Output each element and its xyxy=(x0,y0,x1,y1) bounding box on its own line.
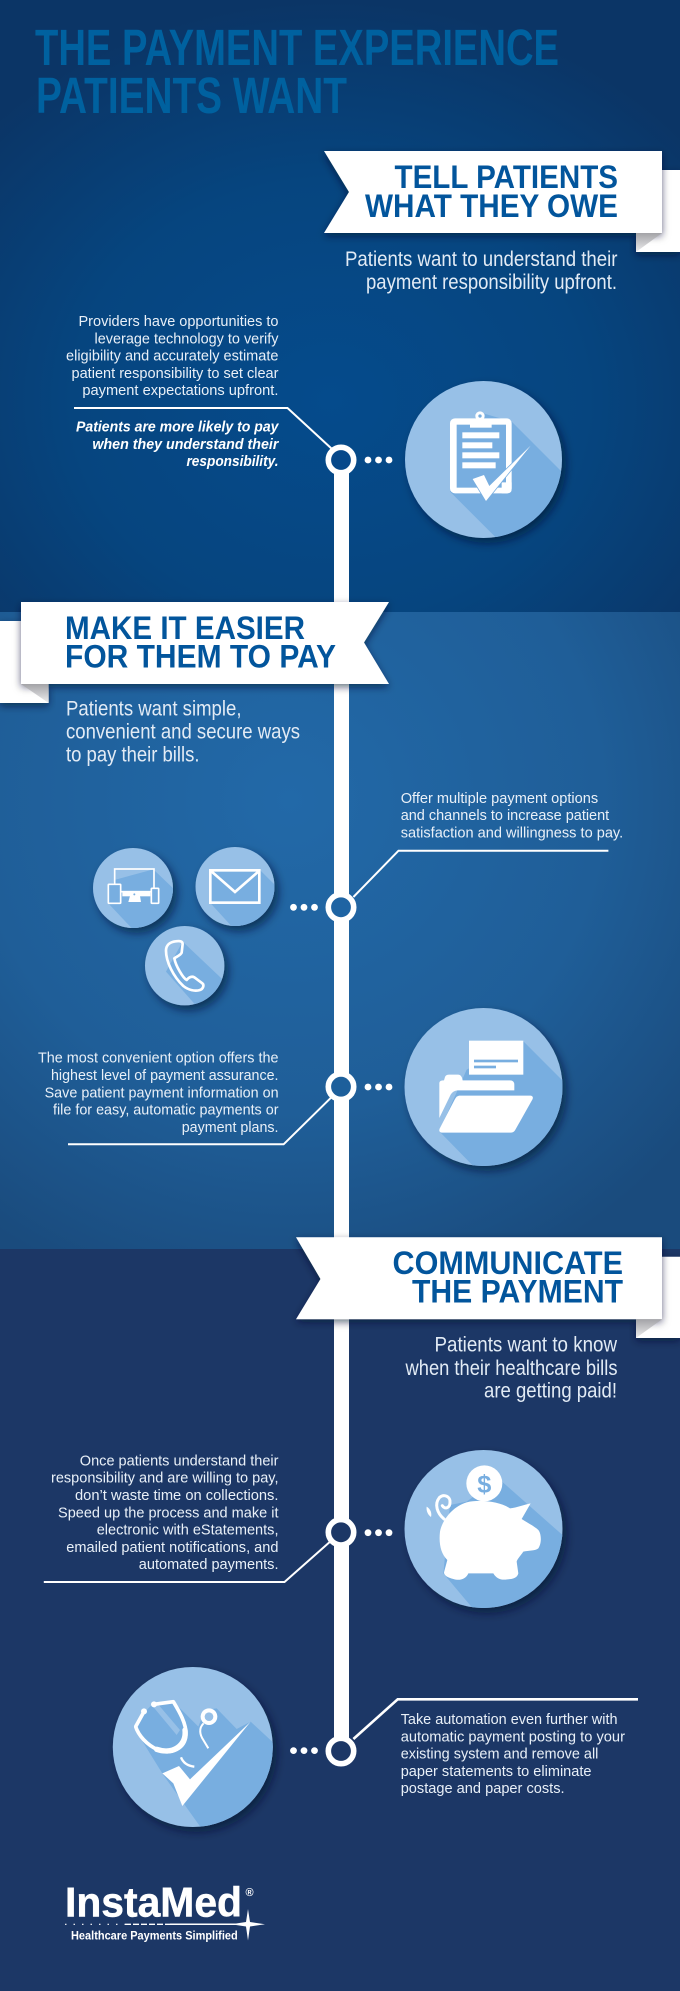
callout connector xyxy=(74,408,332,449)
timeline node xyxy=(328,447,354,473)
subheading: to pay their bills. xyxy=(66,743,200,767)
subheading: payment responsibility upfront. xyxy=(366,270,617,294)
timeline node xyxy=(328,1738,354,1764)
text block: payment options: Offer multiple payment options xyxy=(401,790,598,807)
logo: InstaMed: ® xyxy=(246,1887,254,1899)
ellipsis dots xyxy=(290,1747,318,1754)
text block: convenient option: highest level of payment assurance. xyxy=(51,1067,278,1084)
text block: speed up: Speed up the process and make it xyxy=(58,1504,279,1521)
ellipsis dots xyxy=(290,904,318,911)
text block: payment options xyxy=(401,790,623,842)
ribbon: communicate: COMMUNICATE xyxy=(392,1245,623,1281)
text block: providers: payment expectations upfront. xyxy=(82,382,278,399)
panel: make it easier for them to pay xyxy=(0,602,623,1173)
title xyxy=(35,19,559,124)
background: section two xyxy=(0,612,680,1249)
callout connector xyxy=(44,1542,330,1582)
callout connector xyxy=(68,1098,331,1144)
subheading xyxy=(66,697,300,767)
subheading: are getting paid! xyxy=(484,1379,617,1403)
text block: speed up: automated payments. xyxy=(139,1556,278,1573)
text block: payment options: and channels to increase patient xyxy=(401,807,610,824)
text block: speed up: don’t waste time on collections. xyxy=(75,1487,278,1504)
callout text: responsibility. xyxy=(186,453,278,470)
panel: communicate the payment xyxy=(44,1237,680,1833)
text block: convenient option xyxy=(38,1050,279,1136)
callout text xyxy=(76,419,280,470)
text block: speed up: electronic with eStatements, xyxy=(97,1522,278,1539)
text block: providers xyxy=(66,313,279,399)
text block: speed up: Once patients understand their xyxy=(80,1452,278,1469)
callout text: Patients are more likely to pay xyxy=(76,419,279,436)
icon: piggy bank xyxy=(404,1450,570,1615)
ribbon: communicate: THE PAYMENT xyxy=(412,1274,623,1310)
icon: clipboard with check xyxy=(405,381,570,545)
icon: folder xyxy=(404,1008,570,1173)
text block: convenient option: Save patient payment information on xyxy=(45,1084,279,1101)
subheading xyxy=(345,247,618,294)
text block: providers: leverage technology to verify xyxy=(94,330,279,347)
timeline node xyxy=(328,1074,354,1099)
ribbon: tell patients: WHAT THEY OWE xyxy=(365,188,618,224)
icon: envelope xyxy=(196,847,278,930)
ribbon: tell patients: TELL PATIENTS xyxy=(394,159,618,195)
ellipsis dots xyxy=(365,457,392,463)
title: PATIENTS WANT xyxy=(36,67,347,124)
icon: stethoscope and check xyxy=(113,1667,278,1833)
icon: piggy bank: $ xyxy=(477,1470,491,1498)
callout text: when they understand their xyxy=(92,436,280,453)
text block: speed up: emailed patient notifications, and xyxy=(66,1539,278,1556)
subheading xyxy=(405,1333,618,1403)
subheading: convenient and secure ways xyxy=(66,720,300,744)
subheading: Patients want to know xyxy=(434,1333,617,1357)
timeline spine xyxy=(334,470,349,1740)
timeline node xyxy=(328,895,354,920)
ellipsis dots xyxy=(365,1529,392,1536)
text block: automation: paper statements to eliminate xyxy=(401,1763,592,1780)
text block: speed up: responsibility and are willing to pay, xyxy=(51,1470,278,1487)
text block: convenient option: payment plans. xyxy=(182,1119,278,1136)
text block: automation: Take automation even further with xyxy=(401,1711,618,1728)
panel: tell patients what they owe xyxy=(66,151,680,545)
handset xyxy=(166,941,203,991)
text block: automation: automatic payment posting to your xyxy=(401,1728,625,1745)
logo: InstaMed xyxy=(65,1879,265,1942)
text block: automation: postage and paper costs. xyxy=(401,1780,565,1797)
text block: convenient option: The most convenient option offers the xyxy=(38,1050,278,1067)
text block: convenient option: file for easy, automatic payments or xyxy=(53,1102,278,1119)
text block: providers: Providers have opportunities to xyxy=(78,313,278,330)
text block: providers: eligibility and accurately estimate xyxy=(66,348,278,364)
ribbon: make it easier xyxy=(0,602,389,703)
callout connector xyxy=(353,851,608,897)
ribbon: tell patients xyxy=(324,151,680,252)
icon: devices xyxy=(93,848,177,932)
subheading: Patients want simple, xyxy=(66,697,242,721)
logo: InstaMed: Healthcare Payments Simplified xyxy=(71,1928,238,1942)
text block: automation: existing system and remove all xyxy=(401,1746,598,1763)
ribbon: make it easier: FOR THEM TO PAY xyxy=(65,639,336,675)
ribbon: make it easier: MAKE IT EASIER xyxy=(65,610,305,646)
text block: automation xyxy=(401,1711,625,1797)
text block: payment options: satisfaction and willingness to pay. xyxy=(401,824,623,842)
text block: speed up xyxy=(51,1452,279,1573)
text block: providers: patient responsibility to set clear xyxy=(72,365,278,382)
logo: InstaMed: InstaMed xyxy=(65,1879,242,1926)
callout connector xyxy=(353,1699,638,1739)
timeline node xyxy=(328,1520,354,1545)
ribbon: communicate xyxy=(296,1237,680,1338)
subheading: Patients want to understand their xyxy=(345,247,618,271)
ellipsis dots xyxy=(365,1084,392,1090)
background: section three xyxy=(0,1249,680,1991)
background: section one xyxy=(0,0,680,612)
subheading: when their healthcare bills xyxy=(405,1356,618,1380)
icon: telephone xyxy=(145,926,227,1010)
